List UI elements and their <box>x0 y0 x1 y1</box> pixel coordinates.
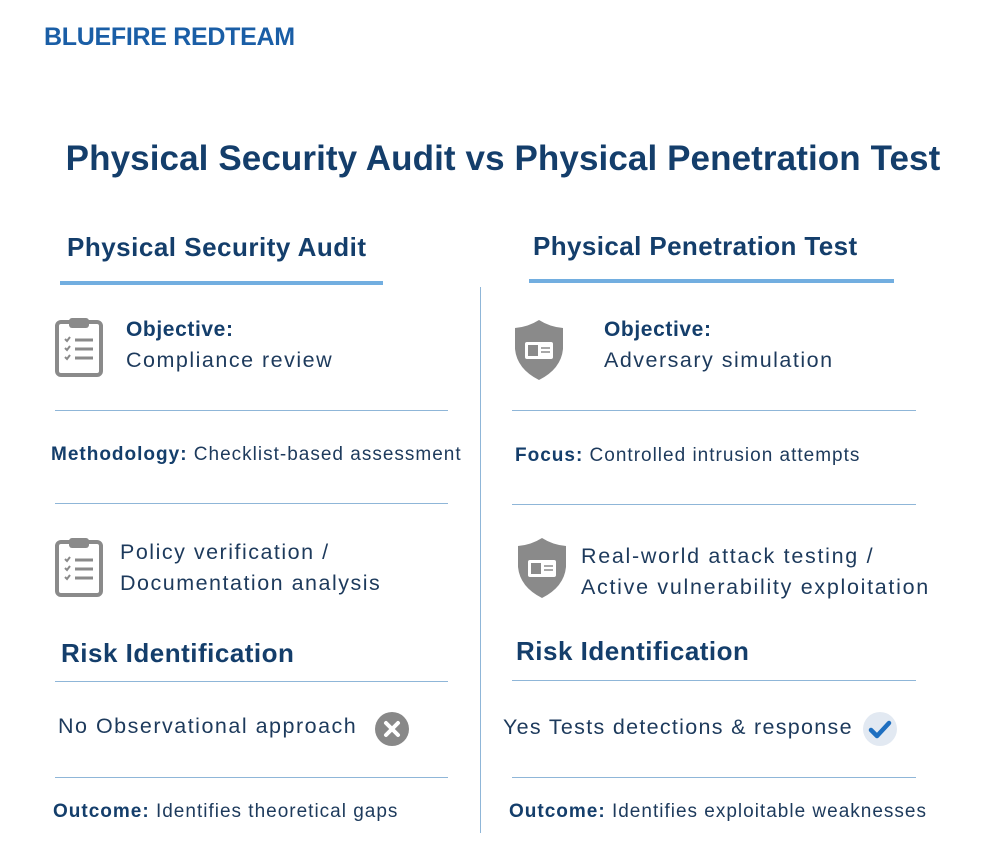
right objective: Adversary simulation <box>604 348 834 372</box>
icon: shield 2 <box>518 538 566 598</box>
title: Physical Security Audit vs Physical Penetration Test <box>66 139 940 178</box>
right objective: Objective: <box>604 318 712 341</box>
icon: check <box>863 712 897 746</box>
real-world text: Active vulnerability exploitation <box>581 575 930 599</box>
real-world text: Real-world attack testing / <box>581 544 874 568</box>
yes tests: Yes Tests detections & response <box>503 715 853 739</box>
left objective: Objective: <box>126 318 234 341</box>
real-world text <box>581 544 930 599</box>
policy text: Documentation analysis <box>120 571 381 595</box>
policy text <box>120 540 381 595</box>
left outcome: Outcome: Identifies theoretical gaps <box>53 801 398 822</box>
left objective: Compliance review <box>126 348 333 372</box>
vertical divider <box>480 287 481 833</box>
brand logo: BLUEFIRE REDTEAM <box>44 23 295 51</box>
right objective <box>604 318 834 372</box>
left heading: Physical Security Audit <box>67 232 367 262</box>
icon: x <box>375 712 409 746</box>
icon: shield 1 <box>515 320 563 380</box>
methodology: Methodology: Checklist-based assessment <box>51 444 462 465</box>
left objective <box>126 318 333 372</box>
no observational: No Observational approach <box>58 714 357 738</box>
left risk heading: Risk Identification <box>61 638 294 668</box>
right outcome: Outcome: Identifies exploitable weaknesses <box>509 801 927 822</box>
right risk heading: Risk Identification <box>516 636 749 666</box>
right heading: Physical Penetration Test <box>533 231 858 261</box>
focus: Focus: Controlled intrusion attempts <box>515 445 860 466</box>
policy text: Policy verification / <box>120 540 330 564</box>
icon: clipboard 1 <box>55 318 103 377</box>
icon: clipboard 2 <box>55 538 103 597</box>
